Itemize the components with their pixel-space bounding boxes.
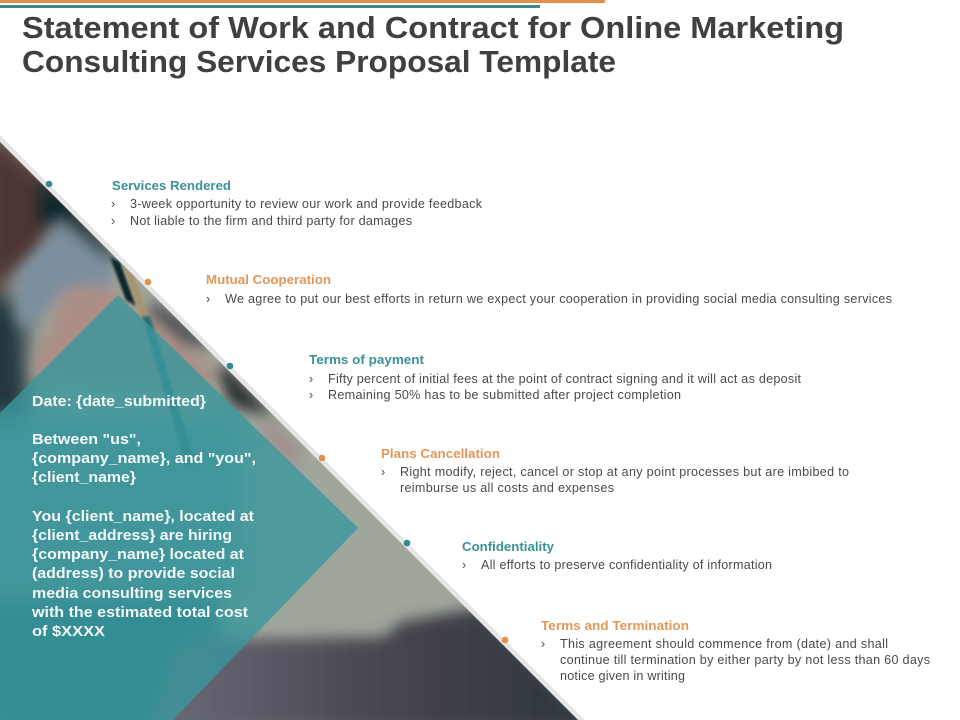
item: Mutual Cooperation: Mutual Cooperation	[206, 272, 331, 287]
item: Plans Cancellation: Right modify, reject, cancel or stop at any point processes but are imbibed to	[400, 465, 849, 479]
photo: hand writing with pen	[0, 120, 600, 720]
panel text: proposal summary: {client_name}	[32, 469, 136, 486]
panel text: proposal summary	[31, 393, 256, 640]
item: Plans Cancellation: Plans Cancellation	[381, 446, 500, 461]
item: Services Rendered	[46, 178, 483, 228]
item: Services Rendered: Services Rendered	[112, 178, 231, 193]
item: Services Rendered: ›	[111, 214, 115, 228]
item: Confidentiality: Confidentiality	[462, 539, 555, 554]
panel text: proposal summary: (address) to provide social	[32, 565, 235, 582]
item: Confidentiality: All efforts to preserve confidentiality of information	[481, 558, 772, 572]
title	[22, 10, 844, 79]
item: Terms of payment: ›	[309, 388, 313, 402]
panel text: proposal summary: {company_name}, and "you",	[32, 450, 256, 467]
top accent bars	[0, 0, 605, 8]
item: Terms of payment: Fifty percent of initial fees at the point of contract signing and it will act as deposit	[328, 372, 802, 386]
item: Terms of payment: Terms of payment	[309, 352, 425, 367]
teal overlay panel	[0, 295, 358, 720]
item: Confidentiality: ›	[462, 558, 466, 572]
item: Terms and Termination: notice given in writing	[560, 669, 685, 683]
item: Terms of payment: ›	[309, 372, 313, 386]
item: Terms of payment	[227, 352, 801, 402]
item: Terms and Termination: Terms and Termination	[541, 618, 689, 633]
panel text: proposal summary: media consulting services	[32, 585, 232, 602]
item: Confidentiality	[404, 539, 772, 572]
item: Services Rendered: Not liable to the firm and third party for damages	[130, 214, 412, 228]
item: Plans Cancellation	[319, 446, 849, 495]
item: Plans Cancellation: reimburse us all costs and expenses	[400, 481, 614, 495]
item: Terms and Termination: continue till termination by either party by not less than 60 days	[560, 653, 930, 667]
item: Terms and Termination	[502, 618, 930, 683]
item: Terms and Termination: This agreement should commence from (date) and shall	[560, 637, 888, 651]
item: Plans Cancellation: ›	[381, 465, 385, 479]
item: Mutual Cooperation	[145, 272, 892, 306]
panel text: proposal summary: Date: {date_submitted}	[32, 393, 206, 410]
item: Terms and Termination: ›	[541, 637, 545, 651]
panel text: proposal summary: {client_address} are hiring	[32, 527, 232, 544]
panel text: proposal summary: You {client_name}, located at	[32, 508, 254, 525]
item: Services Rendered: 3-week opportunity to review our work and provide feedback	[130, 197, 483, 211]
panel text: proposal summary: {company_name} located at	[32, 546, 244, 563]
panel text: proposal summary: of $XXXX	[32, 623, 105, 640]
panel text: proposal summary: with the estimated total cost	[31, 604, 248, 621]
item: Terms of payment: Remaining 50% has to be submitted after project completion	[328, 388, 681, 402]
item: Mutual Cooperation: We agree to put our best efforts in return we expect your cooperation in providing social media consulting services	[225, 292, 892, 306]
title: Consulting Services Proposal Template	[22, 44, 616, 79]
item: Services Rendered: ›	[111, 197, 115, 211]
diagonal divider band	[0, 135, 585, 720]
panel text: proposal summary: Between "us",	[32, 431, 141, 448]
title: Statement of Work and Contract for Online Marketing	[22, 10, 844, 45]
item: Mutual Cooperation: ›	[206, 292, 210, 306]
